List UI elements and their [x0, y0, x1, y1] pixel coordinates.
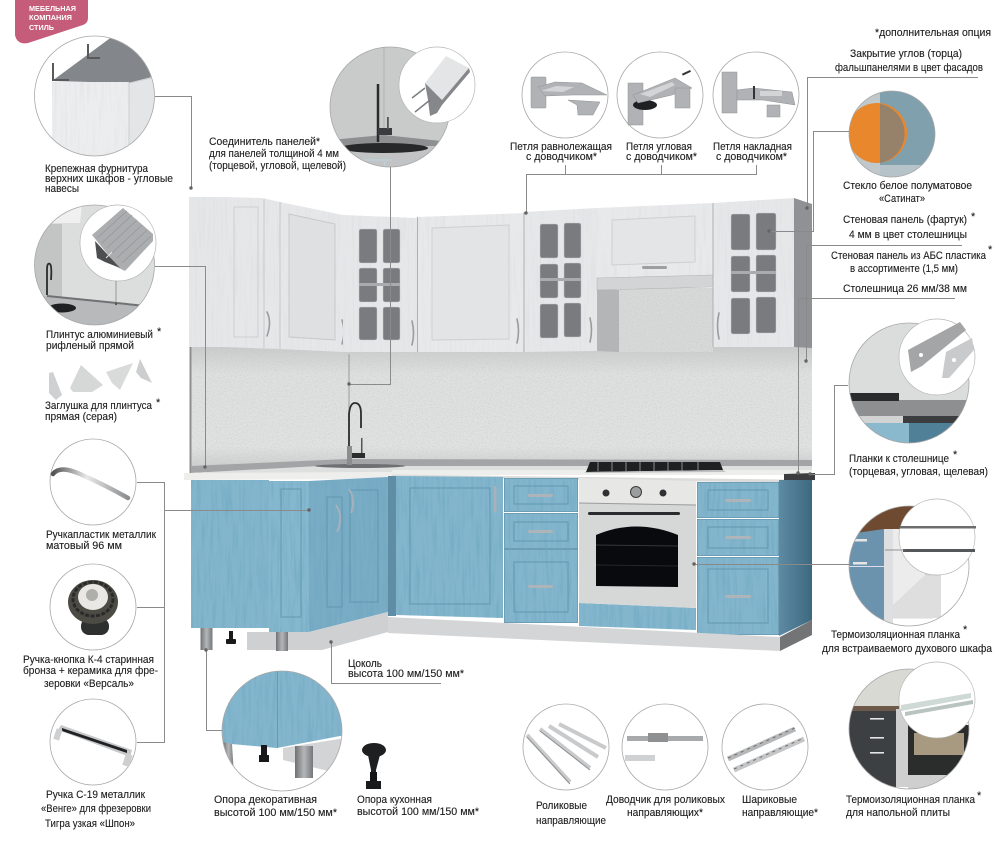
- captions: hinges: с доводчиком*: [716, 151, 788, 163]
- captions: runners: Роликовые: [536, 800, 587, 812]
- glass cabinet 3: [713, 198, 794, 347]
- caption: aluminium skirting: Плинтус алюминиевый: [46, 329, 153, 341]
- circle: equal-lying hinge: [522, 52, 608, 138]
- caption: corner hanging hardware: Крепежная фурнитура: [45, 163, 149, 175]
- captions: hinges: с доводчиком*: [526, 151, 598, 163]
- caption: ABS wall panel: [831, 244, 993, 275]
- left end panel: [191, 480, 269, 628]
- leader lines: [137, 78, 978, 742]
- captions: runners: направляющие*: [742, 807, 819, 819]
- caption: wall panel: 4 мм в цвет столешницы: [849, 229, 967, 241]
- caption: decorative support: высотой 100 мм/150 мм*: [214, 807, 338, 819]
- caption: panel connector: [209, 136, 346, 172]
- left side end panel: [189, 197, 223, 347]
- logo badge: КОМПАНИЯ: [29, 13, 72, 22]
- caption: worktop strips: *: [953, 449, 958, 461]
- caption: skirting end caps: [45, 397, 161, 423]
- circle: worktop strips: [849, 319, 975, 445]
- caption: worktop strips: Планки к столешнице: [849, 453, 949, 465]
- glass cabinet 2: [524, 208, 597, 352]
- circle: angled hinge: [617, 52, 703, 138]
- captions: hinges: Петля накладная: [713, 141, 792, 153]
- niche under hood: [597, 288, 713, 352]
- gap filler: [388, 476, 396, 616]
- caption: matte metallic handle: матовый 96 мм: [46, 540, 122, 552]
- plinth: [247, 612, 812, 651]
- right side panel: [794, 198, 812, 348]
- caption: corner hanging hardware: верхних шкафов - угловые: [45, 173, 173, 185]
- caption: false panels: [835, 48, 983, 74]
- caption: kitchen leg: [357, 794, 480, 818]
- circle: overlay hinge: [713, 52, 799, 138]
- caption: panel connector: для панелей толщиной 4 мм: [209, 148, 339, 160]
- caption: C-19 handle: Ручка С-19 металлик: [46, 789, 145, 801]
- worktop and wall strip: [184, 459, 815, 481]
- caption: knob handle: Ручка-кнопка К-4 старинная: [23, 654, 154, 666]
- kitchen illustration: [184, 197, 815, 651]
- caption: matte metallic handle: [46, 529, 156, 552]
- leader dots: [189, 186, 812, 652]
- drawer stack centre: [504, 478, 578, 623]
- base door: [396, 476, 503, 618]
- caption: worktop strips: [849, 449, 988, 478]
- captions: hinges: Петля равнолежащая: [510, 141, 612, 153]
- caption: decorative support: [214, 794, 338, 819]
- door cabinet: [418, 213, 524, 352]
- caption: aluminium skirting: рифленый прямой: [46, 340, 134, 352]
- caption: matte metallic handle: Ручкапластик металлик: [46, 529, 156, 541]
- legs: [200, 628, 288, 651]
- drawer stack right: [697, 482, 779, 635]
- caption: insulation strip, built-in oven: [822, 624, 993, 655]
- caption: kitchen leg: высотой 100 мм/150 мм*: [357, 806, 480, 818]
- caption: insulation strip, built-in oven: *: [963, 624, 968, 636]
- caption: plinth: Цоколь: [348, 658, 382, 670]
- icon: black kitchen leg: [362, 743, 386, 789]
- captions: runners: Шариковые: [742, 794, 797, 806]
- backsplash wall panel: [190, 346, 812, 474]
- caption: ABS wall panel: в ассортименте (1,5 мм): [850, 263, 958, 275]
- caption: aluminium skirting: *: [157, 326, 162, 338]
- caption: plinth: [348, 658, 465, 680]
- note: optional item: *дополнительная опция: [875, 27, 991, 39]
- circle: corner hanging hardware: [34, 36, 160, 162]
- caption: plinth: высота 100 мм/150 мм*: [348, 668, 465, 680]
- inset: skirting profile: [80, 205, 156, 281]
- caption: satin glass: [843, 180, 972, 205]
- caption: knob handle: зеровки «Версаль»: [44, 678, 134, 690]
- caption: insulation strip, cooker: [846, 790, 982, 819]
- circle: aluminium skirting: [34, 205, 156, 325]
- circle: ball bearing runners: [722, 704, 808, 790]
- circle: C-19 handle: [50, 699, 136, 785]
- logo badge: МЕБЕЛЬНАЯ: [29, 4, 76, 13]
- caption: worktop strips: (торцевая, угловая, щелевая): [849, 466, 988, 478]
- lower cabinets: [191, 476, 812, 636]
- caption: panel connector: (торцевой, угловой, щелевой): [209, 160, 346, 172]
- circle: matte metallic handle: [50, 439, 136, 525]
- caption: corner hanging hardware: навесы: [45, 183, 79, 195]
- caption: panel connector: Соединитель панелей*: [209, 136, 321, 148]
- caption: insulation strip, cooker: Термоизоляционная планка: [846, 794, 976, 806]
- corner cabinet: [223, 197, 344, 352]
- caption: ABS wall panel: *: [988, 244, 993, 256]
- caption: skirting end caps: Заглушка для плинтуса: [45, 400, 153, 412]
- caption: insulation strip, built-in oven: Термоизоляционная планка: [831, 629, 961, 641]
- captions: hinges: с доводчиком*: [626, 151, 698, 163]
- inset: pale strips: [899, 662, 975, 738]
- inset: metal strips: [899, 319, 975, 395]
- caption: corner hanging hardware: [45, 163, 173, 195]
- circle: insulation strip for built-in oven: [849, 499, 976, 626]
- logo badge: СТИЛЬ: [29, 23, 55, 32]
- caption: satin glass: «Сатинат»: [879, 193, 925, 205]
- caption: wall panel: [843, 211, 976, 241]
- caption: satin glass: Стекло белое полуматовое: [843, 180, 972, 192]
- corner unit: [309, 477, 388, 632]
- caption: C-19 handle: «Венге» для фрезеровки: [41, 803, 151, 815]
- captions: runners: [536, 794, 819, 827]
- circle: knob handle: [50, 564, 136, 650]
- caption: C-19 handle: [41, 789, 151, 830]
- inset: corner profile: [399, 47, 475, 123]
- caption: wall panel: *: [971, 211, 976, 223]
- inset: rails: [899, 499, 976, 575]
- captions: hinges: Петля угловая: [626, 141, 692, 153]
- right side blue panel: [779, 480, 812, 636]
- sink and faucet: [315, 403, 405, 468]
- captions: runners: направляющие: [536, 815, 606, 827]
- panel below oven: [579, 603, 696, 630]
- logo badge: [15, 0, 88, 43]
- captions: runners: Доводчик для роликовых: [606, 794, 725, 806]
- caption: insulation strip, cooker: *: [977, 790, 982, 802]
- captions: runners: направляющих*: [627, 807, 704, 819]
- caption: aluminium skirting: [46, 326, 162, 352]
- caption: worktop: Столешница 26 мм/38 мм: [843, 283, 967, 295]
- built-in oven: [579, 478, 696, 608]
- caption: kitchen leg: Опора кухонная: [357, 794, 432, 806]
- caption: skirting end caps: *: [156, 397, 161, 409]
- caption: false panels: Закрытие углов (торца): [850, 48, 962, 60]
- circle: insulation strip for freestanding cooker: [849, 662, 975, 789]
- caption: C-19 handle: Тигра узкая «Шпон»: [45, 818, 135, 830]
- circle: runner soft-close: [622, 704, 708, 790]
- caption: insulation strip, cooker: для напольной плиты: [846, 807, 950, 819]
- icon: skirting end caps: [49, 359, 152, 400]
- caption: knob handle: [23, 654, 158, 690]
- caption: wall panel: Стеновая панель (фартук): [843, 214, 967, 226]
- caption: knob handle: бронза + керамика для фре-: [23, 665, 158, 677]
- captions: hinges: [510, 141, 792, 163]
- corner door: [269, 481, 314, 632]
- caption: skirting end caps: прямая (серая): [45, 411, 117, 423]
- circle: panel connector: [330, 47, 475, 168]
- circle: roller runners: [523, 704, 609, 790]
- gas hob: [584, 462, 726, 473]
- caption: decorative support: Опора декоративная: [214, 794, 317, 806]
- circle: decorative support leg: [220, 665, 345, 791]
- glass cabinet 1: [343, 215, 418, 352]
- upper cabinets: [189, 197, 812, 352]
- lift-up cabinet with hood: [597, 203, 713, 290]
- circle: satin glass: [847, 91, 936, 177]
